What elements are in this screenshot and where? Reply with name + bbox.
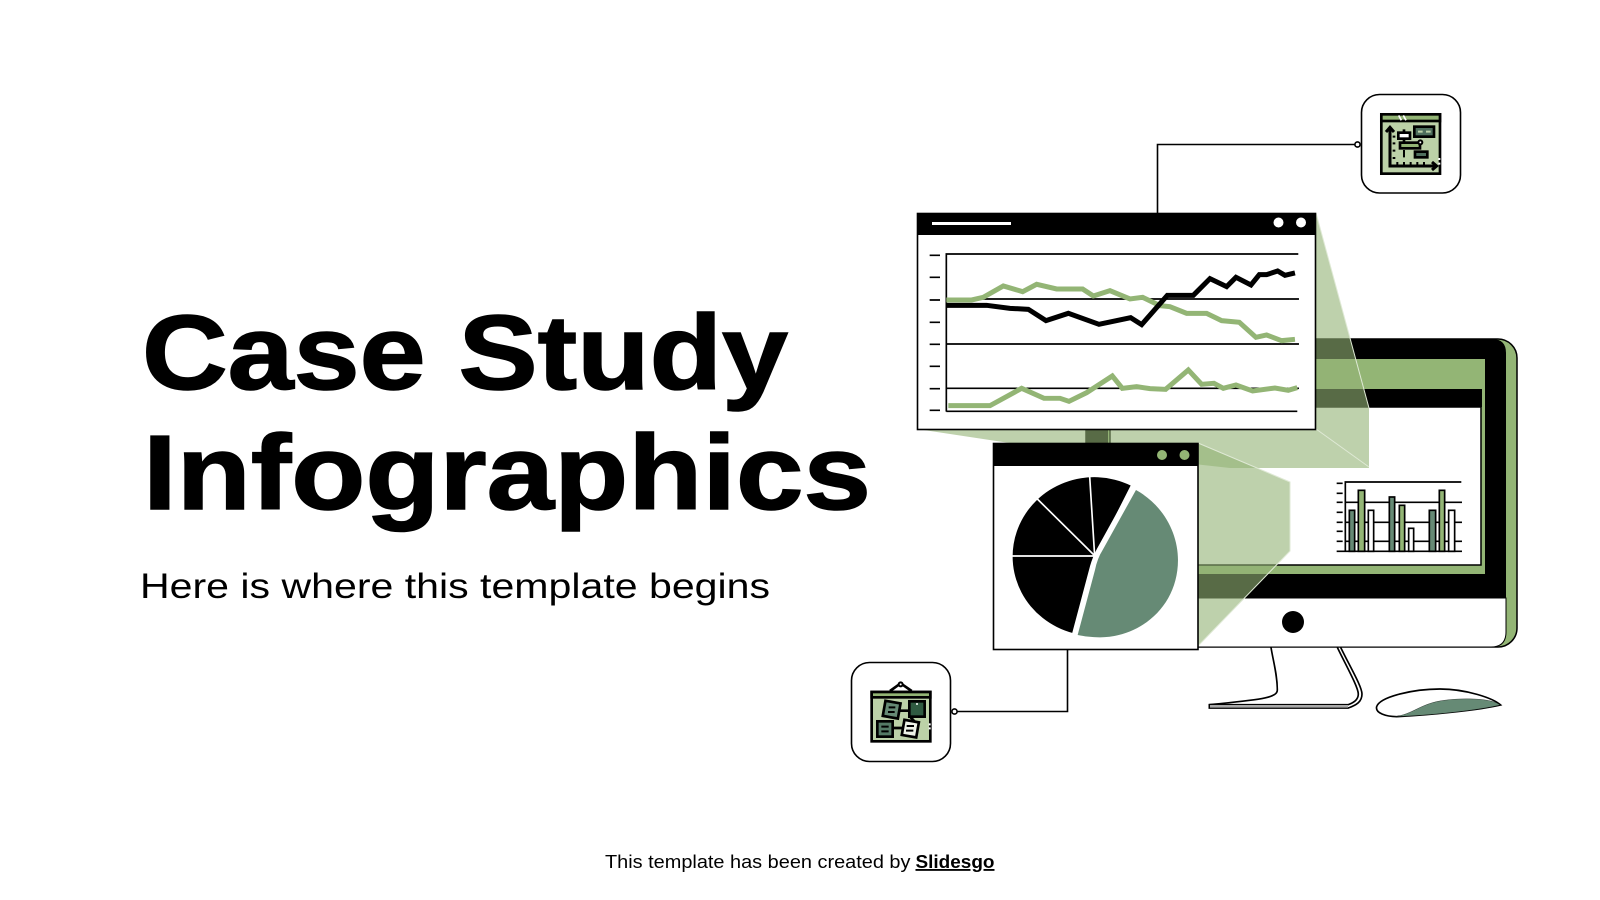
monitor [1086,339,1517,647]
icon: pinboard [872,682,930,741]
icon card: pinboard [852,662,950,762]
footer credit: Slidesgo [916,851,994,872]
mouse [1376,689,1501,717]
title: Case Study [142,294,788,412]
monitor camera [1282,611,1304,633]
icon card: gantt chart [1362,94,1460,193]
panel: pie chart window [993,443,1198,650]
panel: line chart window [917,213,1316,430]
icon: gantt chart [1381,114,1440,174]
title [142,294,871,532]
connector: top window to gantt icon [1158,142,1360,213]
line chart [930,254,1299,412]
zoom projection beams [917,213,1369,646]
window header [917,213,1316,235]
connector: pie window to board icon [952,649,1068,714]
monitor stand [1209,647,1362,708]
monitor bar chart [1337,482,1462,551]
subtitle: Here is where this template begins [140,567,770,606]
pie chart [1012,476,1178,637]
footer credit: This template has been created by [605,851,916,872]
window header [993,443,1198,466]
title: Infographics [143,414,871,532]
